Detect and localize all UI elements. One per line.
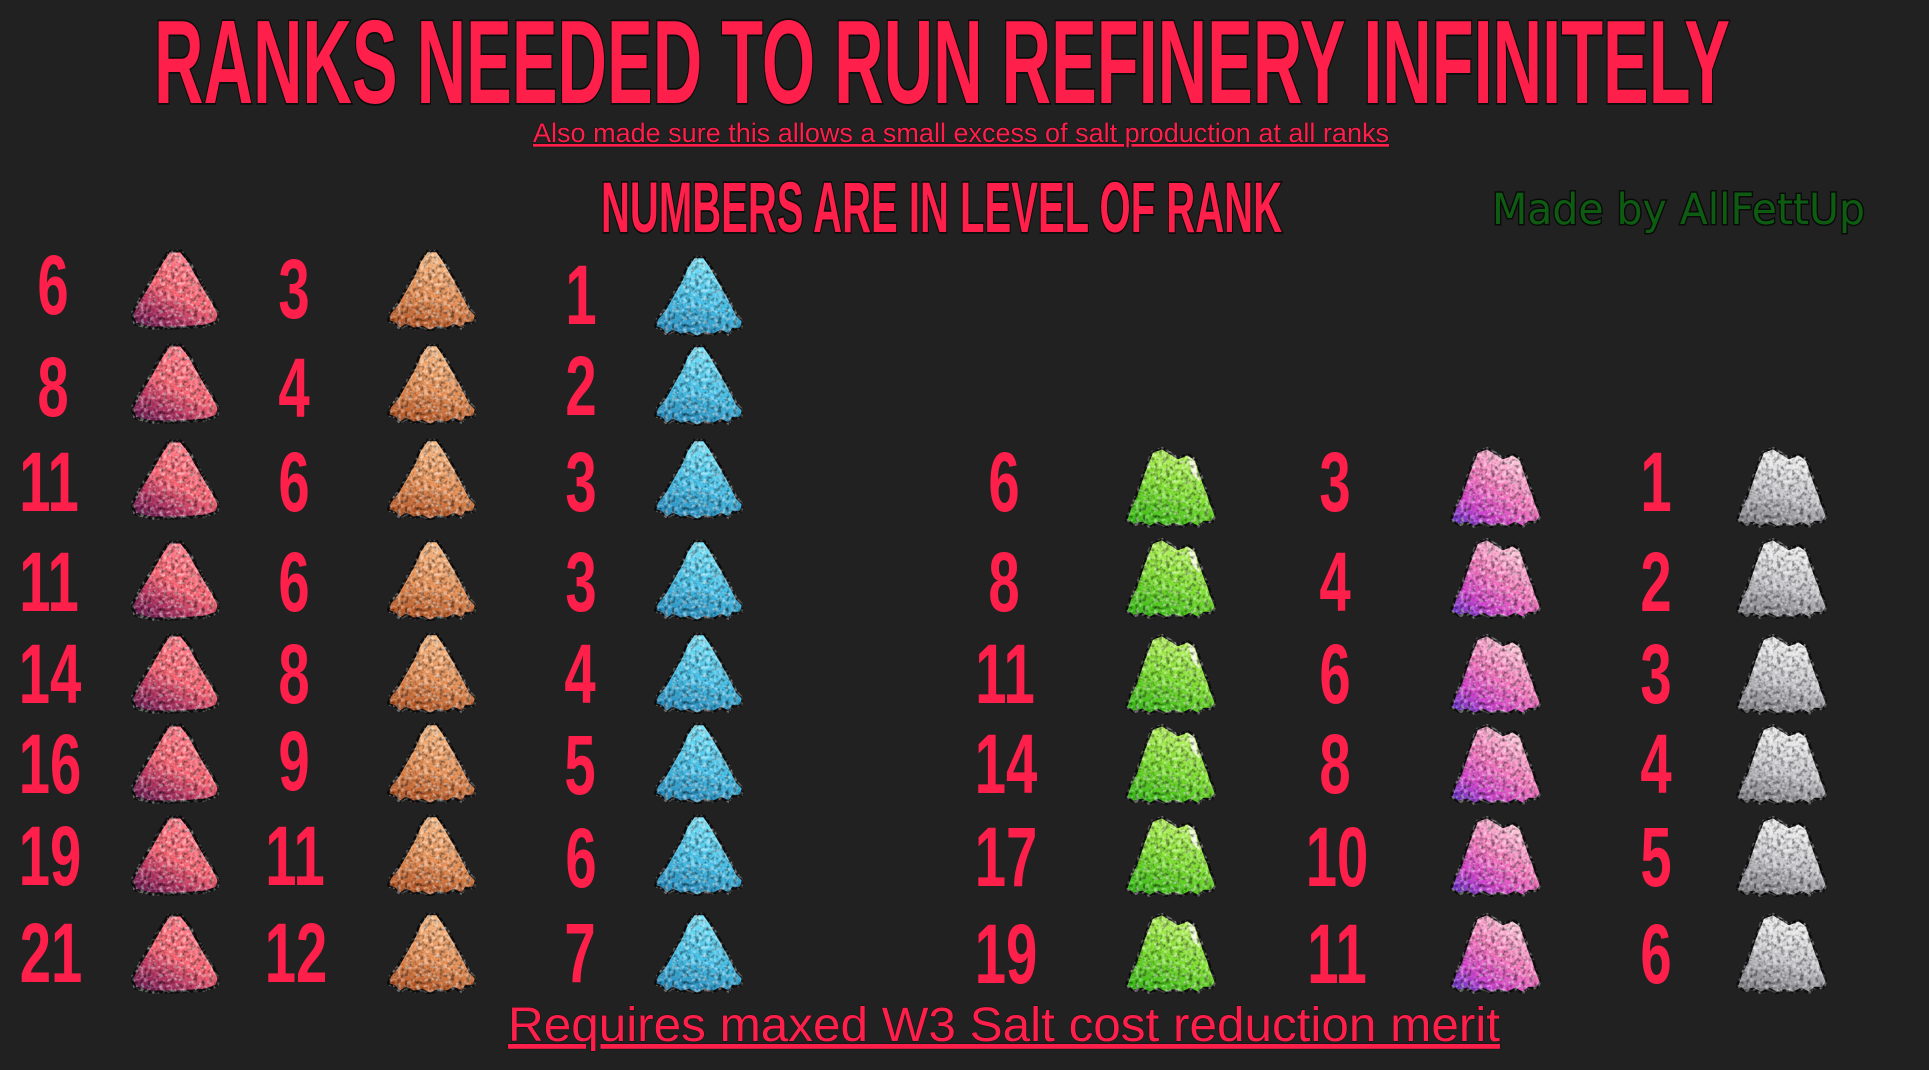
panel: left rank table	[19, 239, 743, 1001]
rank column: silver salt	[1640, 436, 1827, 1002]
rank column: pink salt: 21	[20, 907, 82, 1001]
rank column: orange salt: 12	[265, 907, 327, 1001]
rank column: blue salt: 6	[565, 812, 597, 906]
rank column: magenta salt	[1306, 436, 1541, 1002]
rank column: pink salt: 8	[37, 341, 69, 435]
rank column: orange salt: 6	[278, 536, 310, 630]
rank column: blue salt	[564, 249, 743, 1001]
rank column: magenta salt: 3	[1319, 436, 1351, 530]
rank column: blue salt: 4	[564, 628, 596, 722]
rank column: orange salt	[265, 243, 476, 1001]
rank column: orange salt: 8	[278, 628, 310, 722]
rank column: blue salt: 7	[564, 907, 596, 1001]
rank column: pink salt: 19	[19, 810, 81, 904]
rank column: silver salt: 2	[1640, 536, 1672, 630]
rank column: orange salt: 4	[278, 342, 310, 436]
rank column: silver salt: 6	[1640, 908, 1672, 1002]
rank column: silver salt: 3	[1640, 628, 1672, 722]
rank column: green salt: 14	[975, 718, 1037, 812]
rank column: magenta salt: 8	[1319, 718, 1351, 812]
rank column: pink salt: 6	[37, 239, 69, 333]
rank column: blue salt: 3	[565, 436, 597, 530]
rank column: silver salt: 4	[1640, 718, 1672, 812]
rank column: orange salt: 6	[278, 436, 310, 530]
heading: numbers are level of rank: NUMBERS ARE IN LEVEL OF RANK	[601, 169, 1282, 248]
rank column: green salt: 11	[975, 628, 1035, 722]
rank column: green salt	[975, 436, 1216, 1002]
rank column: pink salt: 14	[19, 628, 81, 722]
rank column: orange salt: 11	[265, 810, 325, 904]
rank column: pink salt: 11	[19, 536, 79, 630]
panel: right rank table	[975, 436, 1827, 1002]
subtitle: Also made sure this allows a small excess of salt production at all ranks	[533, 118, 1389, 148]
rank column: green salt: 8	[988, 536, 1020, 630]
rank column: silver salt: 1	[1640, 436, 1672, 530]
rank column: green salt: 19	[975, 908, 1037, 1002]
rank column: orange salt: 9	[278, 715, 310, 809]
credit: Made by AllFettUp	[1492, 185, 1865, 235]
rank column: blue salt: 1	[565, 249, 597, 343]
rank column: magenta salt: 11	[1307, 908, 1367, 1002]
rank column: pink salt: 16	[19, 718, 81, 812]
rank column: magenta salt: 10	[1306, 811, 1368, 905]
rank column: green salt: 6	[988, 436, 1020, 530]
rank column: magenta salt: 6	[1319, 628, 1351, 722]
rank column: green salt: 17	[975, 811, 1037, 905]
rank column: blue salt: 3	[565, 536, 597, 630]
rank column: magenta salt: 4	[1319, 536, 1351, 630]
rank column: pink salt: 11	[19, 436, 79, 530]
rank column: silver salt: 5	[1640, 811, 1672, 905]
footer note: Requires maxed W3 Salt cost reduction merit	[508, 999, 1500, 1052]
rank column: orange salt: 3	[278, 243, 310, 337]
rank column: pink salt	[19, 239, 219, 1001]
rank column: blue salt: 5	[564, 719, 596, 813]
rank column: blue salt: 2	[565, 340, 597, 434]
